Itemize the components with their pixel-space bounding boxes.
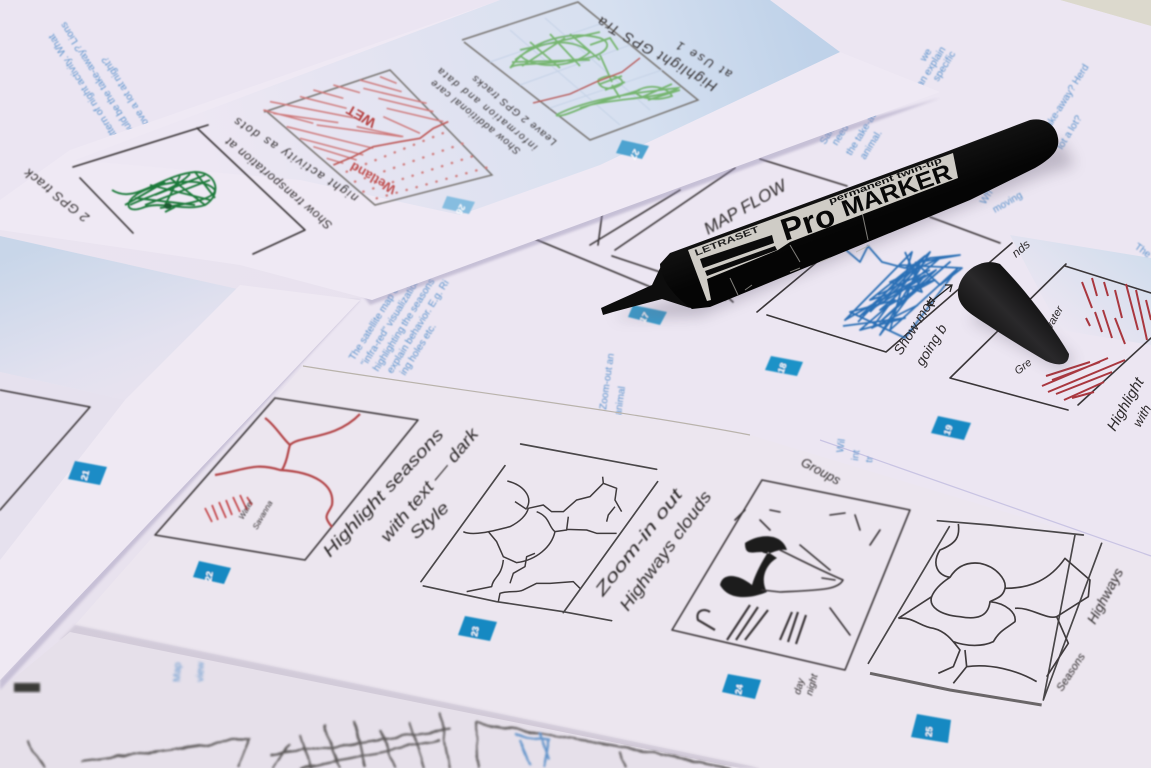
shadow: under top sheet	[360, 98, 940, 305]
note text: right sheet: Zoom-out an	[598, 353, 617, 410]
marker brand text: LETRASET	[693, 224, 761, 258]
sketch frame: left partial	[0, 390, 90, 510]
sketch C: animal head	[672, 454, 910, 697]
sheet: right side storyboard 17 to 19	[300, 0, 1151, 560]
sketch frame 18: movement scribble: nds	[1009, 237, 1033, 260]
marker cap	[958, 262, 1069, 364]
sketch frame 17: map flow	[530, 159, 1000, 302]
badge 23	[458, 616, 497, 641]
sketch frame 19: highlight water: Gre	[1012, 357, 1034, 377]
badge 21	[68, 461, 107, 485]
note text: bottom left: Map	[172, 662, 184, 682]
handwriting: zoom in out: Zoom-in out	[590, 484, 687, 601]
sketch frame: red areas 26: WET	[343, 102, 378, 131]
scribble: red hatching lower	[1042, 358, 1125, 400]
top right corner of table	[1060, 0, 1151, 26]
note text: right sheet: explain behavior. E.g. Ri	[385, 278, 452, 376]
sketch C: animal head: day	[792, 676, 807, 696]
note text: right sheet: the take-aways	[844, 95, 889, 158]
note text: right sheet: Sam	[818, 123, 838, 147]
note text: top left: Pattern of night activity. What	[47, 32, 125, 147]
shadow: cap	[970, 290, 1075, 370]
note text: top left: could be the take-away? Lions	[59, 20, 140, 140]
sketch frame: red areas 26: Leave 2 GPS tracks	[470, 73, 559, 147]
note text: right sheet	[347, 45, 1151, 416]
sketch frame: green tracks 27	[462, 2, 734, 140]
shadow: fold of left sheet	[0, 300, 360, 690]
note text: right sheet: moving	[991, 190, 1024, 216]
note text: right sheet: we	[918, 47, 935, 64]
sketch A: highlight seasons: Highlight seasons	[319, 424, 448, 561]
sketch frame 19: highlight water	[950, 264, 1151, 434]
handwriting: show moving: Show mou	[890, 293, 939, 358]
note text: right sheet: lot a lot?	[1055, 113, 1085, 152]
marker body	[660, 119, 1058, 309]
badge 23: 23	[469, 626, 481, 637]
badge 26: 26	[454, 203, 467, 216]
badge 24: 24	[733, 684, 745, 695]
note text: right sheet: The satellite map changes	[347, 258, 418, 363]
sketch frame: green tracks 27: at Use 1	[674, 38, 734, 82]
badge 25	[911, 714, 951, 743]
sketch frame: red areas 26: information and data	[435, 65, 540, 152]
sheet: top left notes	[0, 0, 540, 210]
handwriting: highlight GPS tracks: Highlight GPS Tra	[594, 14, 720, 95]
handwriting: highways: Highways	[1084, 565, 1126, 626]
sketch D: zoomed clouds	[868, 521, 1102, 705]
scratches	[730, 212, 870, 295]
note text: right sheet: specific	[931, 49, 958, 84]
note text: right sheet: ing holes etc.	[398, 322, 439, 378]
badge 19: 19	[942, 424, 955, 436]
drawing: antelope head with horns	[720, 536, 787, 597]
handwriting: show transportation: Show transportation at	[222, 135, 335, 232]
badge 27	[616, 140, 649, 161]
note text: bottom right: tr	[864, 455, 876, 463]
sketch A: highlight seasons: Style	[406, 498, 453, 543]
sketch frame 19: highlight water: water	[1042, 303, 1067, 334]
badge 26	[442, 196, 475, 216]
marker pen: permanent twin-tip	[827, 155, 943, 206]
sketch A: highlight seasons	[155, 398, 483, 561]
sketch frame: red areas 26	[263, 65, 559, 205]
note text: right sheet: Wh	[978, 188, 995, 207]
handwriting: highways	[1054, 565, 1126, 694]
black bars on label	[700, 235, 777, 276]
shadow: bottom sheet edge	[60, 625, 760, 768]
sketch frame: green night tracks: 2 GPS track	[20, 165, 93, 226]
sketch frame: green night tracks	[20, 115, 361, 254]
sketch frame: red areas 26: Wetland	[347, 159, 398, 197]
note text: right sheet: the take-away? Herd	[1033, 63, 1091, 147]
badge 24	[722, 674, 761, 699]
marker pen	[601, 119, 1058, 315]
note text: right sheet: animal.	[858, 128, 885, 162]
marker pen: MARKER	[838, 158, 955, 222]
note text: right sheet: animal	[613, 386, 628, 416]
scribble: blue tracks	[843, 246, 962, 338]
badge 27: 27	[628, 148, 641, 161]
note text: bottom left	[172, 661, 207, 682]
note text: bottom right: Wil	[835, 438, 848, 453]
note text: bottom right: int	[850, 449, 862, 461]
note text: bottom right	[835, 438, 876, 463]
handwriting: groups: Groups	[799, 454, 844, 488]
arrow: double headed	[927, 285, 952, 306]
shadow: marker	[612, 140, 1075, 318]
note text: right sheet: highlighting the seasons	[371, 277, 437, 374]
scribble: red hatching upper	[1082, 278, 1151, 344]
note text: top left: move a lot at night?	[100, 54, 156, 134]
sheet: left storyboard	[0, 236, 360, 680]
sketch B: zoom out	[421, 444, 658, 621]
sketch frame 18: movement scribble	[757, 237, 1033, 369]
badge 22	[193, 561, 231, 584]
sketch C: animal head: night	[804, 672, 821, 697]
badge 25: 25	[924, 726, 934, 737]
handwriting: zoom in out: Highways clouds	[616, 487, 716, 614]
handwriting: show additional layers: Show additional care	[429, 77, 523, 156]
note text: right sheet: can explain	[912, 45, 948, 94]
sheet: bottom foreground	[0, 632, 740, 768]
badge 21: 21	[79, 469, 91, 481]
sheet: bottom main storyboard	[75, 366, 1151, 768]
badge 17: 17	[638, 311, 651, 324]
handwriting: map flow: MAP FLOW	[700, 175, 791, 238]
marker tip	[601, 264, 690, 315]
handwriting: highways: Seasons	[1054, 651, 1088, 694]
small black clip at the edge	[14, 683, 40, 692]
dots: lower area	[347, 132, 490, 198]
handwriting: sketch A caption: Water	[237, 498, 255, 521]
badge 18: 18	[776, 362, 789, 374]
note text: right sheet: "infra-red" visualization	[359, 277, 422, 369]
marker pen: Pro	[776, 197, 839, 248]
marker label	[688, 153, 958, 301]
sketch frame: green night tracks: night activity as dots	[231, 115, 361, 205]
note text: right sheet: need to make	[830, 90, 872, 148]
badge 22: 22	[203, 571, 215, 582]
sheet: top storyboard strip	[0, 0, 940, 300]
sketch A: highlight seasons: Savanna	[251, 499, 275, 531]
note text: bottom left: view	[195, 661, 207, 682]
badge 19	[931, 416, 971, 440]
scribble: green cluster	[112, 172, 215, 212]
badge 18	[765, 356, 803, 376]
handwriting: zoom in out	[590, 484, 716, 614]
blurred sketches	[28, 712, 730, 768]
handwriting: highlight water: Highlight	[1104, 374, 1148, 434]
sketch frame 18: movement scribble: going b	[912, 321, 950, 369]
badge 17	[628, 305, 667, 325]
sketch A: highlight seasons: with text — dark	[377, 423, 483, 546]
hatching: red	[205, 495, 252, 522]
hatching and boundary: red area	[263, 77, 490, 198]
